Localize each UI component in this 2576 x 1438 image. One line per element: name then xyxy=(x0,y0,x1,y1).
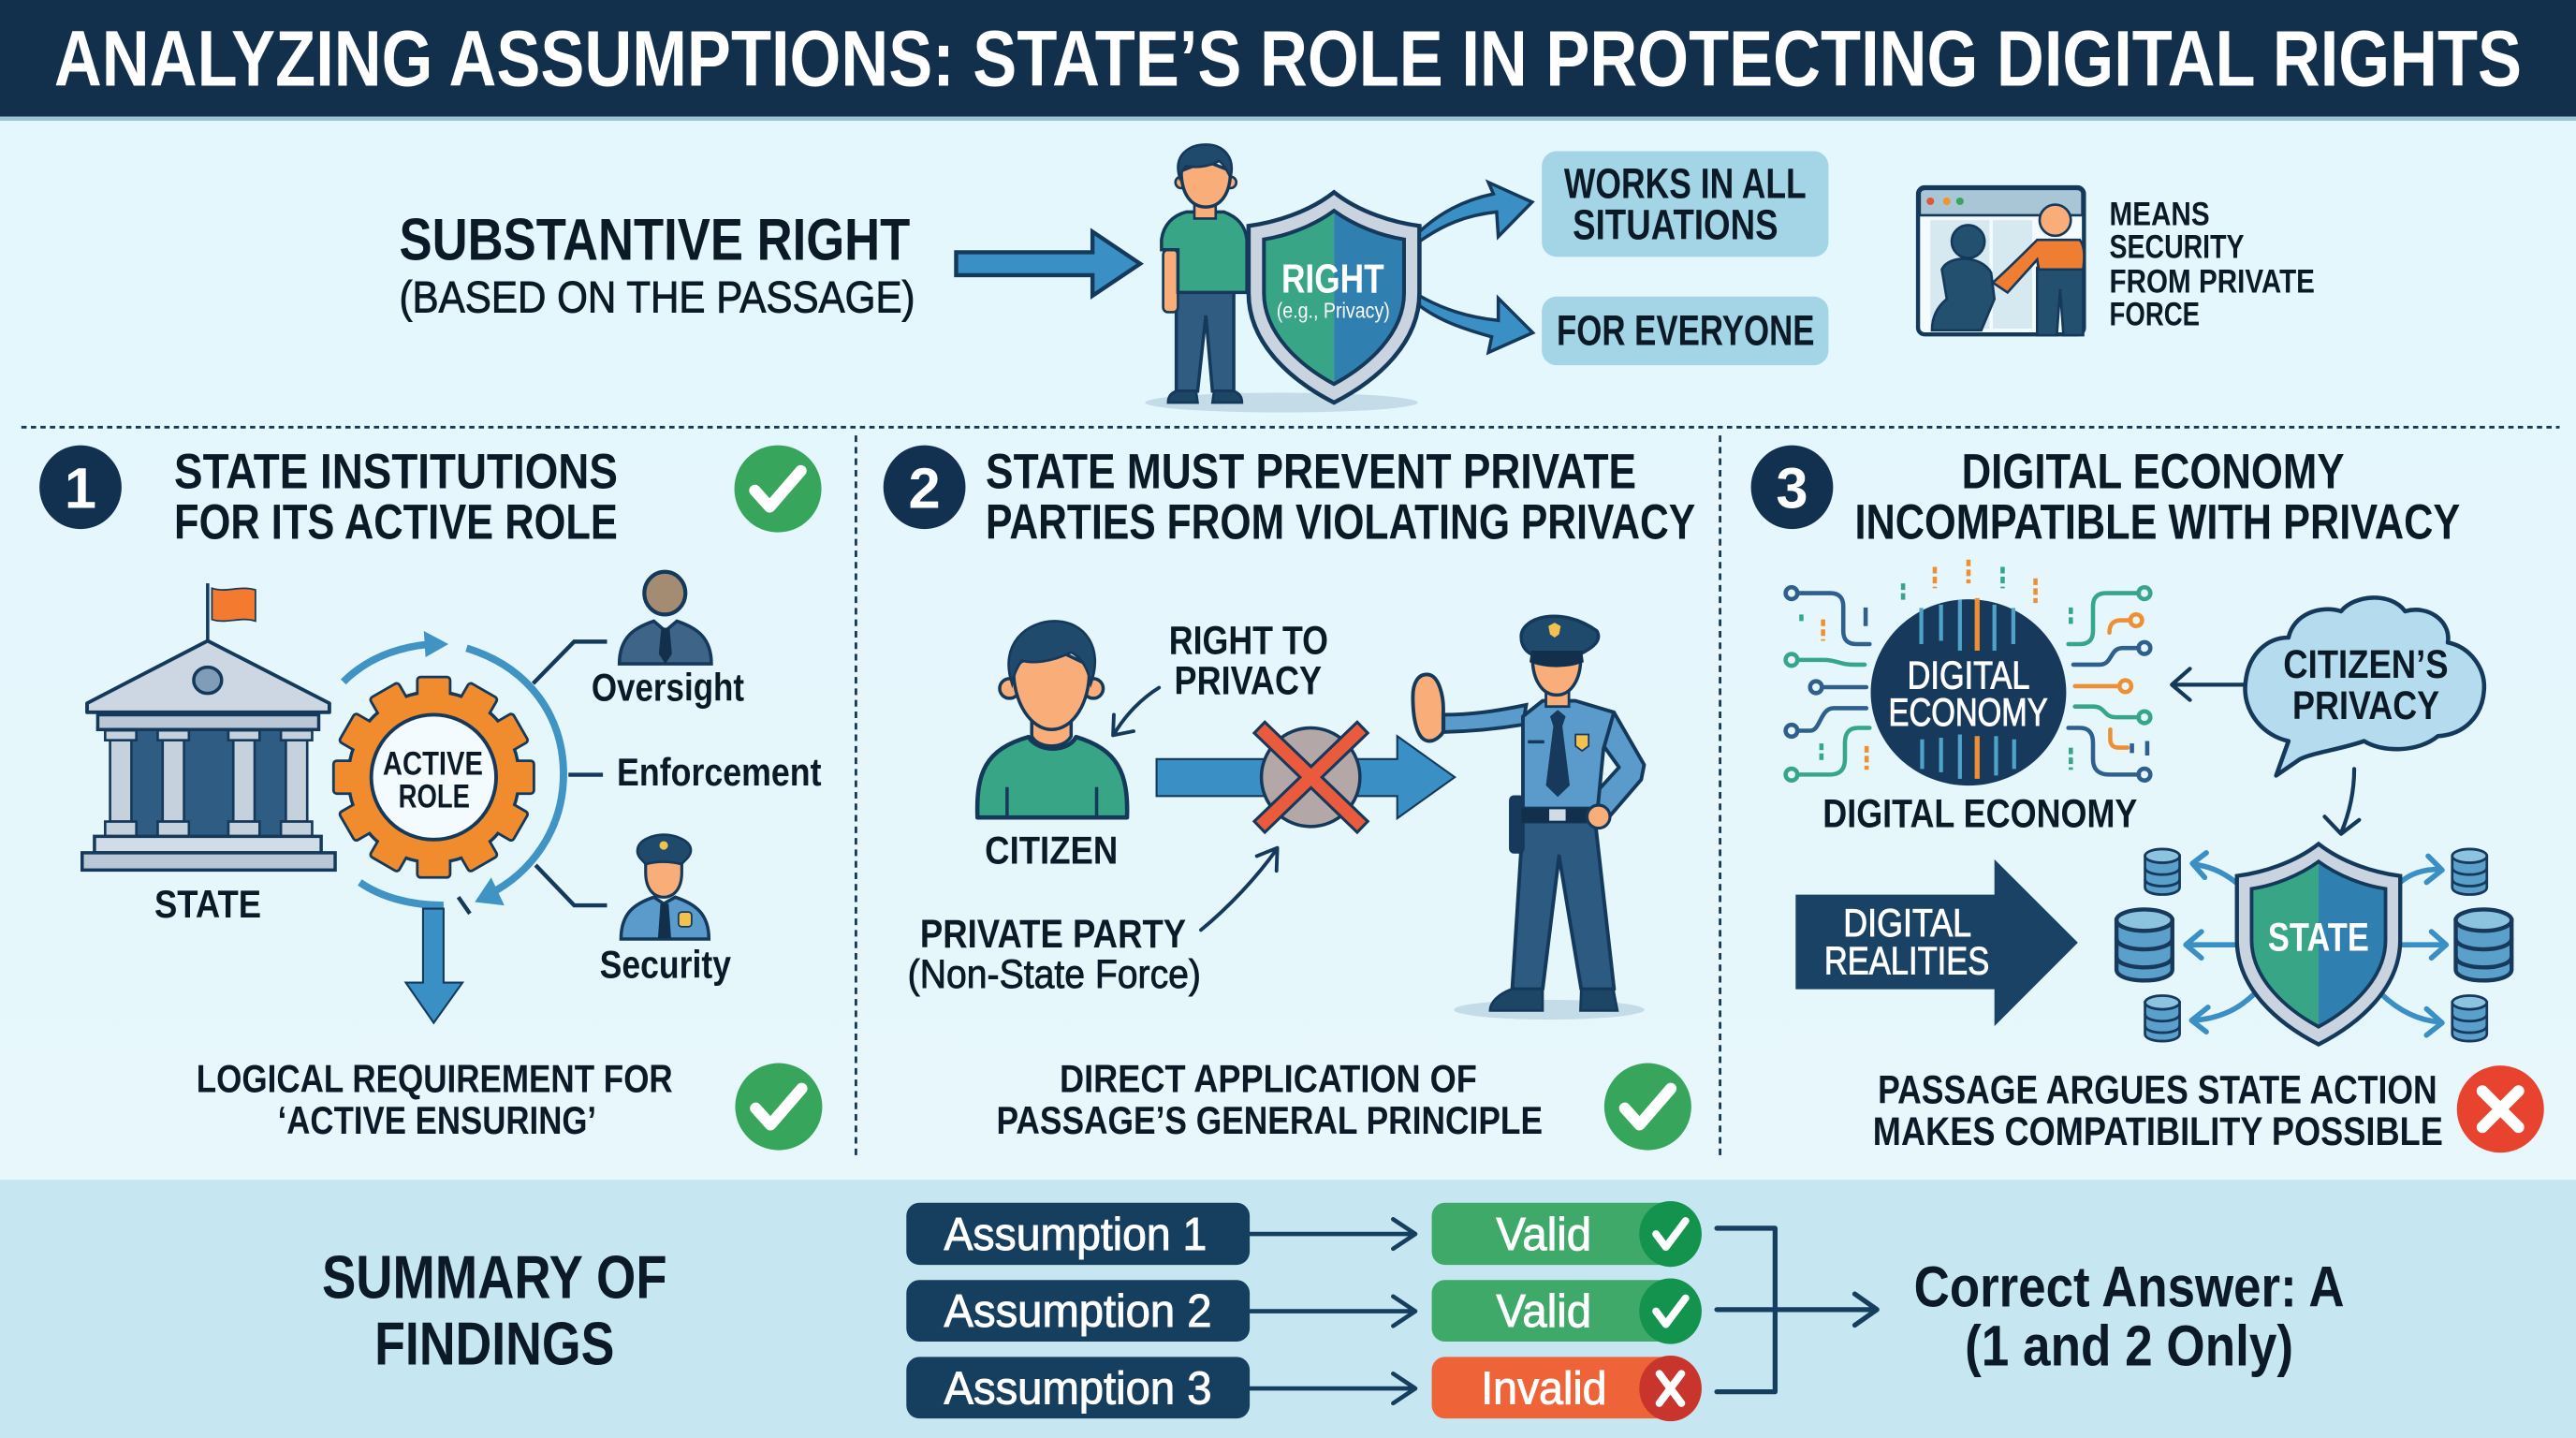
arrow: cycle arcs xyxy=(344,631,564,914)
text: direct application: PASSAGE’S GENERAL PRINCIPLE xyxy=(996,1098,1543,1142)
icon: databases xyxy=(2116,849,2511,1041)
label: private party xyxy=(908,912,1201,997)
badge: number 2 xyxy=(884,446,965,529)
panel: assumption 1 xyxy=(39,444,822,1151)
badge: number 1: 1 xyxy=(65,456,96,521)
badge: number 2: 2 xyxy=(909,456,941,521)
panel: assumption 3 xyxy=(1751,444,2544,1154)
icon: state building xyxy=(82,583,335,870)
box: works in all situations xyxy=(1542,151,1828,257)
text: direct application xyxy=(996,1056,1543,1142)
badge: number 3 xyxy=(1751,446,1833,529)
label: state: STATE xyxy=(154,882,261,926)
badge: number 1 xyxy=(39,446,122,529)
icon: person with shield xyxy=(1145,144,1419,413)
label: right to privacy xyxy=(1169,619,1328,704)
arrow: digital realities xyxy=(1795,859,2078,1026)
row: assumption 3 xyxy=(906,1356,1702,1421)
arrow: to works in all situations xyxy=(1419,183,1532,242)
box: for everyone xyxy=(1542,297,1828,365)
row: assumption 3: Invalid xyxy=(1481,1363,1606,1414)
icon: state shield: STATE xyxy=(2268,915,2369,960)
heading: substantive right xyxy=(399,207,915,322)
text: logical requirement xyxy=(197,1056,673,1142)
heading: assumption 2 xyxy=(986,444,1695,550)
icon: state shield xyxy=(2237,844,2400,1045)
icon: active role gear: ACTIVE xyxy=(383,746,483,783)
text: means security from private force: FORCE xyxy=(2110,297,2200,333)
icon: valid check xyxy=(1604,1064,1691,1151)
icon: active role gear: ROLE xyxy=(399,779,470,815)
icon: person with shield: (e.g., Privacy) xyxy=(1277,299,1390,323)
icon: citizen's privacy cloud xyxy=(2246,597,2484,775)
icon: person with shield: RIGHT xyxy=(1281,256,1384,301)
icon: security from private force xyxy=(1918,187,2085,335)
row: assumption 2: Assumption 2 xyxy=(944,1286,1212,1337)
text: passage argues xyxy=(1873,1068,2443,1154)
arrow: blocked flow xyxy=(1157,736,1455,818)
text: means security from private force xyxy=(2110,196,2315,333)
icon: active role gear xyxy=(333,677,534,877)
icon: valid check xyxy=(735,1064,822,1151)
icon: blocked x xyxy=(1262,728,1360,827)
text: logical requirement: ‘ACTIVE ENSURING’ xyxy=(278,1098,596,1142)
heading: assumption 3: DIGITAL ECONOMY xyxy=(1962,444,2345,499)
panel: summary of findings xyxy=(0,1180,2576,1438)
label: oversight: Oversight xyxy=(592,667,744,710)
label: right to privacy: RIGHT TO xyxy=(1169,619,1328,664)
arrow: digital realities: REALITIES xyxy=(1824,938,1989,982)
badge: number 3: 3 xyxy=(1776,456,1808,521)
icon: digital economy circuit: DIGITAL xyxy=(1908,653,2029,697)
heading: assumption 2: PARTIES FROM VIOLATING PRIVACY xyxy=(986,495,1695,550)
row: assumption 2: Valid xyxy=(1496,1286,1591,1337)
arrow: to right holder xyxy=(956,231,1140,296)
arrow: digital realities: DIGITAL xyxy=(1843,901,1971,945)
arrow: right to privacy to citizen xyxy=(1113,688,1159,735)
label: citizen: CITIZEN xyxy=(985,828,1118,872)
label: private party: PRIVATE PARTY xyxy=(920,912,1186,957)
text: passage argues: PASSAGE ARGUES STATE ACTION xyxy=(1878,1068,2437,1113)
arrow: private party to block xyxy=(1201,848,1278,930)
heading: summary of findings xyxy=(322,1243,667,1377)
panel: substantive right xyxy=(399,144,2315,413)
heading: assumption 1 xyxy=(174,444,618,550)
label: private party: (Non-State Force) xyxy=(908,952,1201,997)
panel: assumption 2 xyxy=(884,444,1695,1151)
heading: assumption 3 xyxy=(1855,444,2460,550)
icon: digital economy circuit: ECONOMY xyxy=(1888,691,2048,734)
heading: substantive right: (BASED ON THE PASSAGE) xyxy=(399,272,915,322)
text: correct answer: (1 and 2 Only) xyxy=(1965,1313,2293,1378)
connectors xyxy=(534,641,607,905)
text: means security from private force: MEANS xyxy=(2110,196,2210,232)
icon: security officer xyxy=(621,835,709,939)
label: digital economy: DIGITAL ECONOMY xyxy=(1822,792,2137,837)
icon: digital economy circuit xyxy=(1786,560,2150,785)
arrow: cloud to state shield xyxy=(2324,769,2359,834)
heading: assumption 1: STATE INSTITUTIONS xyxy=(174,444,618,499)
text: correct answer xyxy=(1914,1255,2345,1378)
text: direct application: DIRECT APPLICATION OF xyxy=(1060,1056,1477,1100)
arrow: down to requirement xyxy=(406,909,462,1023)
row: assumption 3: Assumption 3 xyxy=(944,1363,1212,1414)
icon: police officer xyxy=(1412,616,1645,1020)
heading: assumption 2: STATE MUST PREVENT PRIVATE xyxy=(986,444,1636,499)
text: means security from private force: FROM PRIVATE xyxy=(2110,263,2315,300)
heading: summary of findings: SUMMARY OF xyxy=(322,1243,667,1312)
icon: data arrows xyxy=(2186,853,2446,1035)
row: assumption 1: Assumption 1 xyxy=(944,1210,1207,1260)
heading: substantive right: SUBSTANTIVE RIGHT xyxy=(399,207,910,272)
icon: citizen xyxy=(977,621,1127,817)
box: works in all situations: SITUATIONS xyxy=(1573,200,1778,248)
box: works in all situations: WORKS IN ALL xyxy=(1564,159,1807,207)
icon: citizen's privacy cloud: PRIVACY xyxy=(2292,683,2439,728)
heading: summary of findings: FINDINGS xyxy=(374,1309,614,1377)
text: passage argues: MAKES COMPATIBILITY POSSIBLE xyxy=(1873,1109,2443,1154)
icon: oversight official xyxy=(620,572,711,664)
icon: citizen's privacy cloud: CITIZEN’S xyxy=(2283,642,2449,687)
icon: valid check xyxy=(735,446,822,533)
text: correct answer: Correct Answer: A xyxy=(1914,1255,2345,1319)
row: assumption 2 xyxy=(906,1278,1702,1344)
text: means security from private force: SECURITY xyxy=(2110,229,2244,266)
label: security: Security xyxy=(600,943,731,986)
heading: assumption 3: INCOMPATIBLE WITH PRIVACY xyxy=(1855,495,2460,550)
row: assumption 1 xyxy=(906,1201,1702,1267)
label: right to privacy: PRIVACY xyxy=(1175,659,1322,704)
arrow: to for everyone xyxy=(1419,296,1533,352)
arrow: cloud to digital economy xyxy=(2172,668,2245,700)
bracket arrow to answer xyxy=(1717,1228,1877,1392)
box: for everyone: FOR EVERYONE xyxy=(1557,307,1815,355)
heading: assumption 1: FOR ITS ACTIVE ROLE xyxy=(174,495,618,550)
row: assumption 1: Valid xyxy=(1496,1210,1591,1260)
label: enforcement: Enforcement xyxy=(617,751,822,794)
icon: invalid x xyxy=(2457,1065,2544,1152)
text: logical requirement: LOGICAL REQUIREMENT FOR xyxy=(197,1056,673,1100)
